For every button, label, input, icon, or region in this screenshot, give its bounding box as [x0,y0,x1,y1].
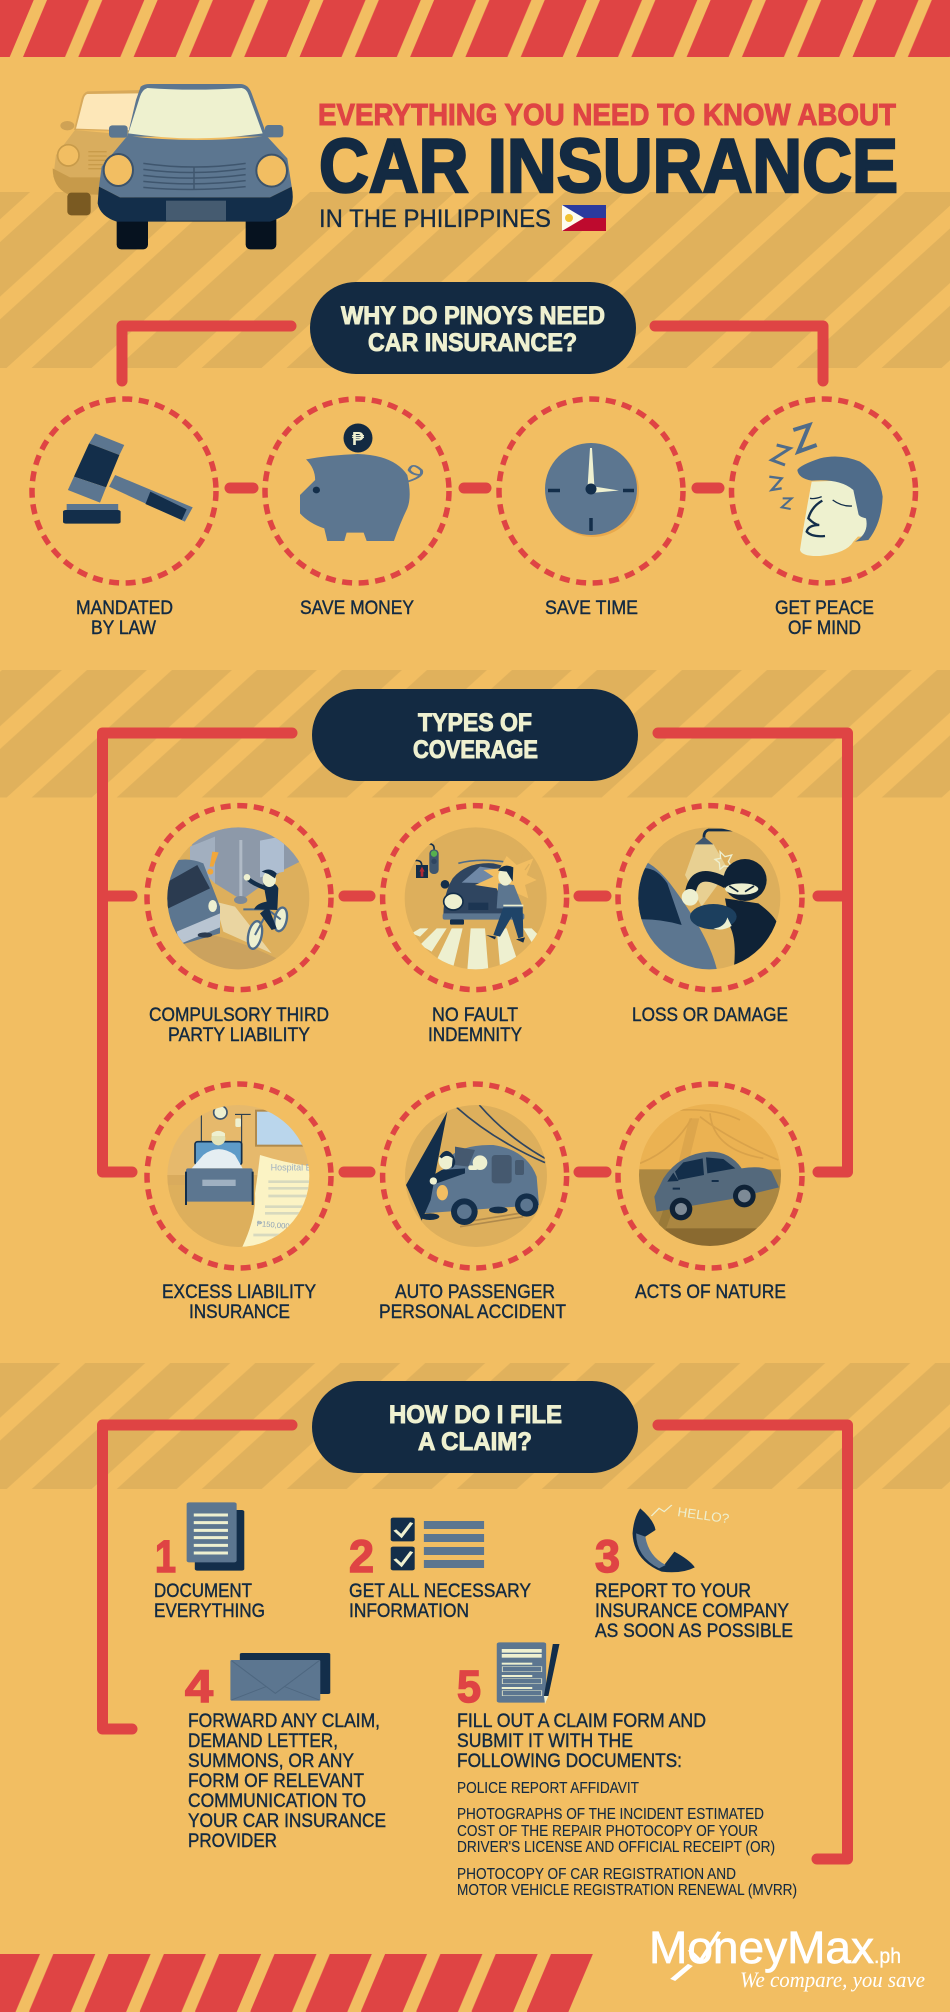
panel: coverage types [103,806,845,1323]
coverage: excess liability insurance [147,1084,331,1323]
connector [464,482,486,494]
section heading: how do I file a claim: A CLAIM? [418,1428,532,1456]
coverage: acts of nature [618,1084,802,1303]
label: MANDATED [76,598,173,619]
text [154,1581,265,1622]
label: PARTY LIABILITY [168,1025,310,1046]
reason: save money [265,399,449,619]
label: BY LAW [91,618,156,639]
label: OF MIND [788,618,861,639]
document list [457,1780,797,1899]
text: FORM OF RELEVANT [188,1771,364,1792]
text: SUBMIT IT WITH THE [457,1731,633,1752]
icon: gavel [63,433,193,524]
illustration: pedestrian hit by car [404,828,546,970]
label: AUTO PASSENGER [395,1282,555,1303]
icon: claim form and pen [497,1642,559,1704]
reason: save time [499,399,683,619]
label [149,1005,329,1046]
coverage: auto passenger personal accident [379,1084,567,1323]
section heading: how do I file a claim: HOW DO I FILE [389,1401,562,1429]
illustration: hospital bed and bill: Hospital Bill [271,1163,318,1173]
icon: peso coin: ₱ [352,429,364,449]
bottom hazard stripes [0,1954,593,2012]
illustration: hospital bed and bill: ₱150,000 [256,1219,290,1231]
text: PROVIDER [188,1831,277,1852]
label: COMPULSORY THIRD [149,1005,329,1026]
icon: piggy bank [300,454,422,541]
label: INDEMNITY [428,1025,522,1046]
document list: PHOTOCOPY OF CAR REGISTRATION AND [457,1866,736,1883]
panel: reasons [32,399,916,639]
connector [818,890,845,902]
label: PERSONAL ACCIDENT [379,1302,566,1323]
icon: checklist [391,1518,484,1570]
section heading: why do Pinoys need car insurance: WHY DO PINOYS NEED [341,302,605,330]
connector [103,890,132,902]
sub heading: IN THE PHILIPPINES [319,205,551,233]
eyebrow heading: EVERYTHING YOU NEED TO KNOW ABOUT [318,97,896,132]
number: 3 [595,1531,620,1582]
number: 4 [185,1661,213,1712]
section heading: why do Pinoys need car insurance [310,282,636,374]
illustration: crashed car [403,1103,550,1250]
label: SAVE MONEY [300,598,414,619]
step 3 [595,1504,793,1642]
connector frame left [102,733,292,1172]
document list: DRIVER'S LICENSE AND OFFICIAL RECEIPT (OR) [457,1839,775,1856]
coverage: compulsory third party liability [147,806,331,1046]
connector [344,1166,370,1178]
icon: magnifier check [673,1932,719,1980]
section heading: how do I file a claim [312,1381,638,1473]
connector frame right [658,1425,848,1859]
label [379,1282,566,1323]
text: COMMUNICATION TO [188,1791,366,1812]
number: 2 [349,1531,374,1582]
icon: document [187,1502,244,1571]
label [162,1282,316,1323]
illustration: cyclist and car [167,827,310,970]
text [188,1711,386,1852]
label [76,598,173,639]
label: SAVE TIME [545,598,638,619]
illustration: hospital bed and bill [167,1105,310,1247]
section heading: why do Pinoys need car insurance: CAR INSURANCE? [368,329,577,357]
reason: peace of mind [732,399,916,639]
document list: MOTOR VEHICLE REGISTRATION RENEWAL (MVRR) [457,1882,797,1899]
connector bracket left [122,326,291,381]
logo: MoneyMax.ph [649,1922,925,1992]
icon: clock [545,443,639,537]
text: INSURANCE COMPANY [595,1601,789,1622]
document list: POLICE REPORT AFFIDAVIT [457,1780,639,1797]
main heading: CAR INSURANCE [319,124,898,209]
step 5 [457,1642,797,1899]
connector bracket right [655,326,823,381]
icon: sleeping head [769,425,883,556]
text [457,1711,706,1772]
text: INFORMATION [349,1601,469,1622]
text: AS SOON AS POSSIBLE [595,1621,793,1642]
text: DOCUMENT [154,1581,252,1602]
title [318,97,898,233]
label [775,598,874,639]
label [428,1005,522,1046]
connector [697,482,719,494]
speech text: HELLO? [677,1504,730,1526]
text: SUMMONS, OR ANY [188,1751,354,1772]
logo: MoneyMax.ph: MoneyMax [649,1922,875,1973]
top hazard stripes [0,0,950,57]
label: EXCESS LIABILITY [162,1282,316,1303]
connector [230,482,253,494]
section heading: types of coverage: COVERAGE [413,736,538,764]
section heading: types of coverage [312,689,638,781]
label: NO FAULT [432,1005,518,1026]
icon: phone [633,1505,695,1572]
icon: two cars [53,84,293,249]
connector [344,890,370,902]
text: FORWARD ANY CLAIM, [188,1711,380,1732]
text: YOUR CAR INSURANCE [188,1811,386,1832]
section heading: types of coverage: TYPES OF [418,709,532,737]
connector [579,890,606,902]
connector frame right [658,733,848,1172]
text: FOLLOWING DOCUMENTS: [457,1751,682,1772]
text [595,1581,793,1642]
connector [579,1166,606,1178]
blue car front [98,84,293,249]
text: FILL OUT A CLAIM FORM AND [457,1711,706,1732]
text: REPORT TO YOUR [595,1581,751,1602]
number: 5 [457,1661,481,1712]
reason: mandated by law [32,399,216,639]
tagline: We compare, you save [740,1967,925,1992]
icon: peso coin [344,424,372,452]
label: GET PEACE [775,598,874,619]
document list: COST OF THE REPAIR PHOTOCOPY OF YOUR [457,1823,758,1840]
connector frame left [102,1425,292,1729]
step 2 [349,1518,531,1622]
text: EVERYTHING [154,1601,265,1622]
illustration: car in flood [637,1102,783,1248]
icon: envelope [230,1653,330,1701]
tan car behind [53,90,143,215]
text: DEMAND LETTER, [188,1731,338,1752]
text: GET ALL NECESSARY [349,1581,531,1602]
illustration: car thief [638,828,780,970]
label: ACTS OF NATURE [635,1282,786,1303]
panel: claim steps [154,1502,797,1899]
number: 1 [155,1531,176,1582]
step 4 [185,1653,386,1852]
icon: Philippine flag [562,205,606,231]
document list: PHOTOGRAPHS OF THE INCIDENT ESTIMATED [457,1806,764,1823]
label: LOSS OR DAMAGE [632,1005,788,1026]
coverage: no fault indemnity [383,806,567,1046]
logo: MoneyMax.ph: .ph [874,1945,901,1968]
coverage: loss or damage [618,806,802,1026]
text [349,1581,531,1622]
label: INSURANCE [189,1302,290,1323]
step 1 [154,1502,265,1622]
